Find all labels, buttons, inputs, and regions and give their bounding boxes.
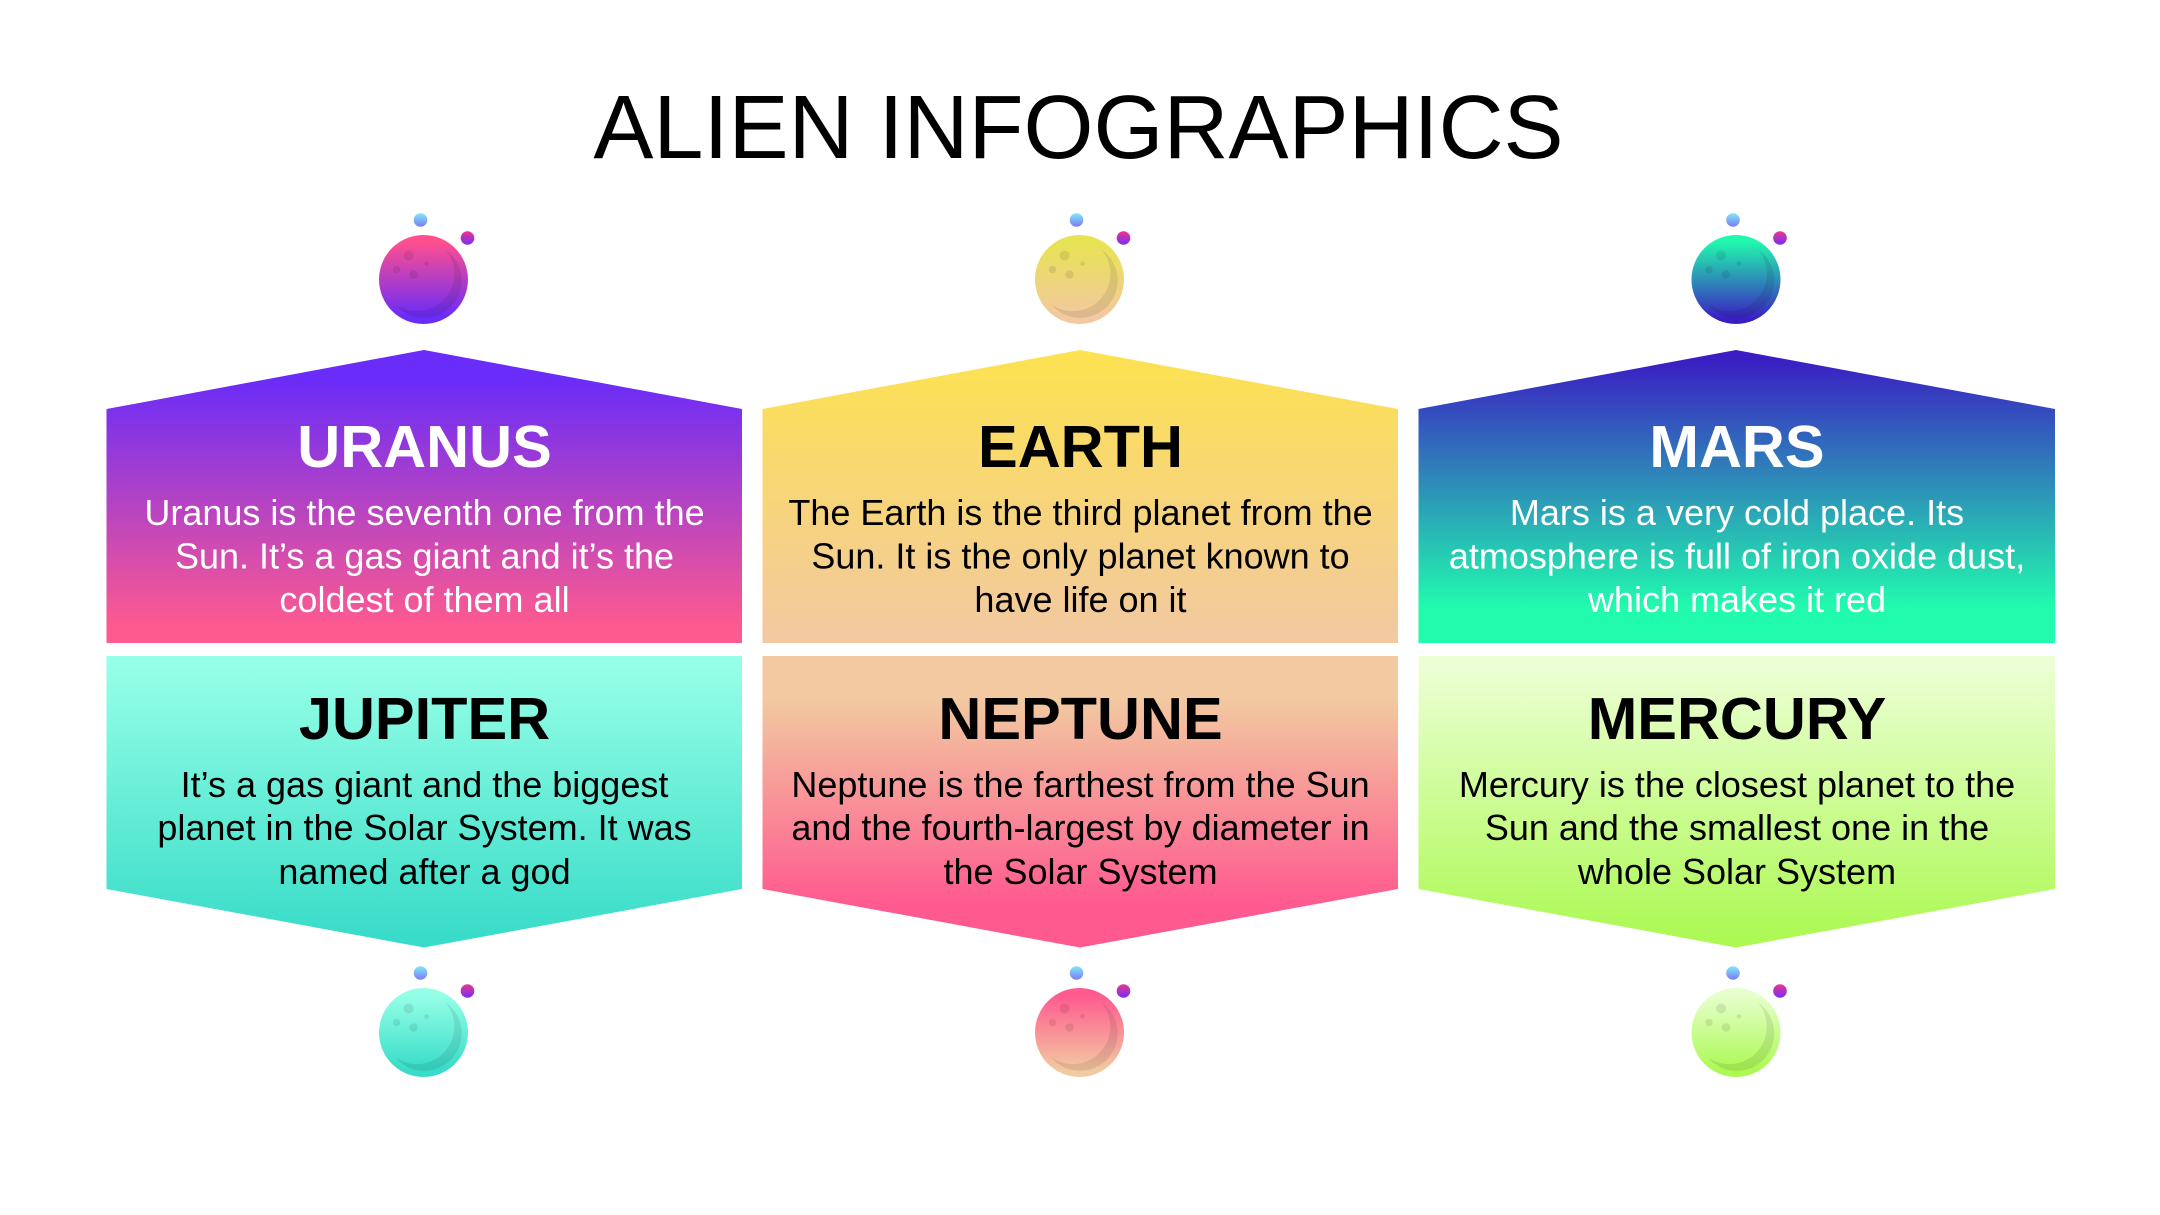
panel: Mercury	[1418, 656, 2055, 948]
text: Neptune description	[791, 764, 1370, 892]
heading: Uranus: URANUS	[297, 413, 552, 480]
text: Mars description: which makes it red	[1587, 579, 1886, 620]
text: Mars description	[1449, 492, 2025, 620]
icon: Jupiter planet	[379, 966, 474, 1077]
panel: Neptune	[762, 656, 1398, 948]
text: Earth description: The Earth is the third planet from the	[788, 492, 1373, 533]
panel shape: Jupiter	[106, 656, 742, 948]
icon: Uranus planet	[379, 213, 474, 324]
panel shape: Mercury	[1418, 656, 2055, 948]
panel: Mars	[1418, 350, 2055, 643]
heading: Mercury: MERCURY	[1588, 685, 1886, 752]
text: Earth description	[788, 492, 1373, 620]
panel shape: Earth	[762, 350, 1398, 643]
panel shape: Neptune	[762, 656, 1398, 948]
icon: Mercury planet	[1692, 966, 1787, 1077]
text: Uranus description	[144, 492, 705, 620]
text: Neptune description: and the fourth-largest by diameter in	[791, 807, 1370, 848]
panel: Earth	[762, 350, 1398, 643]
heading: Neptune: NEPTUNE	[938, 685, 1223, 752]
text: Uranus description: Sun. It’s a gas giant and it’s the	[175, 536, 674, 576]
heading: Earth: EARTH	[978, 413, 1183, 480]
panel shape: Mars	[1418, 350, 2055, 643]
icon: Neptune planet	[1035, 966, 1130, 1077]
text: Earth description: Sun. It is the only planet known to	[811, 536, 1350, 576]
text: Mercury description: Mercury is the closest planet to the	[1459, 764, 2015, 805]
text: Uranus description: coldest of them all	[279, 579, 570, 620]
text: Mars description: Mars is a very cold place. Its	[1510, 492, 1964, 533]
heading: Mars: MARS	[1649, 413, 1825, 480]
text: Jupiter description	[157, 764, 692, 892]
title: ALIEN INFOGRAPHICS	[593, 78, 1564, 178]
heading: Jupiter: JUPITER	[299, 685, 550, 752]
icon: Earth planet	[1035, 213, 1130, 324]
text: Uranus description: Uranus is the seventh one from the	[144, 492, 705, 533]
text: Neptune description: Neptune is the farthest from the Sun	[791, 764, 1370, 805]
text: Neptune description: the Solar System	[943, 851, 1218, 892]
text: Mercury description: Sun and the smallest one in the	[1485, 807, 1989, 848]
text: Jupiter description: named after a god	[278, 851, 571, 892]
text: Jupiter description: It’s a gas giant and the biggest	[181, 764, 668, 805]
text: Jupiter description: planet in the Solar System. It was	[157, 807, 692, 848]
text: Mars description: atmosphere is full of iron oxide dust,	[1449, 536, 2025, 576]
panel: Jupiter	[106, 656, 742, 948]
text: Mercury description: whole Solar System	[1577, 851, 1896, 892]
text: Mercury description	[1459, 764, 2015, 892]
panel: Uranus	[106, 350, 742, 643]
text: Earth description: have life on it	[974, 579, 1187, 620]
panel shape: Uranus	[106, 350, 742, 643]
icon: Mars planet	[1692, 213, 1787, 324]
